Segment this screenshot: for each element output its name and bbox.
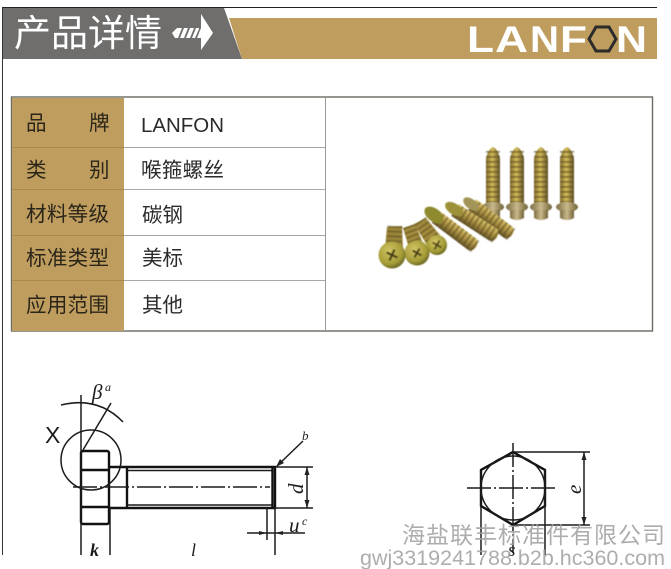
row: material grade: 碳钢	[142, 204, 183, 227]
bottom white margin	[0, 556, 671, 569]
row: standard type	[26, 247, 183, 270]
angle marks	[45, 380, 123, 555]
row: category: 喉箍螺丝	[141, 159, 224, 182]
row: brand: 牌	[89, 112, 110, 135]
header tab: product details	[3, 8, 242, 59]
dimensions: u	[289, 513, 300, 537]
logo: LANFON: N	[616, 19, 647, 60]
row: category: 类	[26, 159, 46, 182]
row: category: 别	[89, 159, 110, 182]
row: brand: 品	[26, 112, 46, 135]
dimensions: k	[90, 540, 99, 560]
diagram: hexagon head top view: s	[508, 540, 515, 561]
row: brand	[26, 112, 224, 137]
row: material grade	[26, 203, 183, 227]
dimensions: l	[191, 540, 196, 560]
logo: LANFON: L	[467, 19, 494, 60]
dimensions: d	[284, 483, 308, 494]
icon: hexagon O	[589, 27, 616, 51]
row: brand: LANFON	[141, 114, 224, 137]
panel: product specification table	[12, 97, 652, 331]
angle marks: X	[45, 422, 60, 448]
logo: LANFON: A	[495, 19, 528, 60]
watermark	[360, 522, 665, 569]
watermark: 海盐联丰标准件有限公司	[402, 522, 665, 548]
diagram: hexagon head top view	[467, 443, 590, 561]
logo: LANFON: F	[560, 19, 587, 60]
row: application: 其他	[142, 294, 183, 317]
front screws with Phillips heads	[378, 218, 447, 268]
diagram: hexagon head top view: e	[562, 485, 586, 494]
photo: zinc-plated flange screws	[378, 147, 578, 268]
heading: 产品详情: 产品详情	[14, 13, 162, 54]
row: application: 应用范围	[26, 294, 109, 317]
row: category	[26, 159, 224, 182]
angle marks: β	[91, 380, 103, 404]
row: standard type: 美标	[142, 247, 183, 270]
header band: gold logo bar	[229, 18, 657, 59]
row: standard type: 标准类型	[26, 247, 109, 270]
row: material grade: 材料等级	[26, 203, 109, 226]
lying screws	[421, 195, 516, 253]
row: application	[26, 294, 183, 317]
logo: LANFON: N	[530, 19, 559, 60]
dimensions	[90, 428, 313, 560]
dimensions: b	[302, 428, 309, 443]
diagram: bolt side view	[45, 380, 313, 560]
angle marks: a	[105, 380, 111, 394]
icon: striped arrow	[172, 14, 213, 50]
bolt body	[73, 451, 275, 524]
dimensions: c	[302, 514, 308, 528]
upright screws	[482, 147, 578, 220]
logo: LANFON	[467, 19, 647, 60]
